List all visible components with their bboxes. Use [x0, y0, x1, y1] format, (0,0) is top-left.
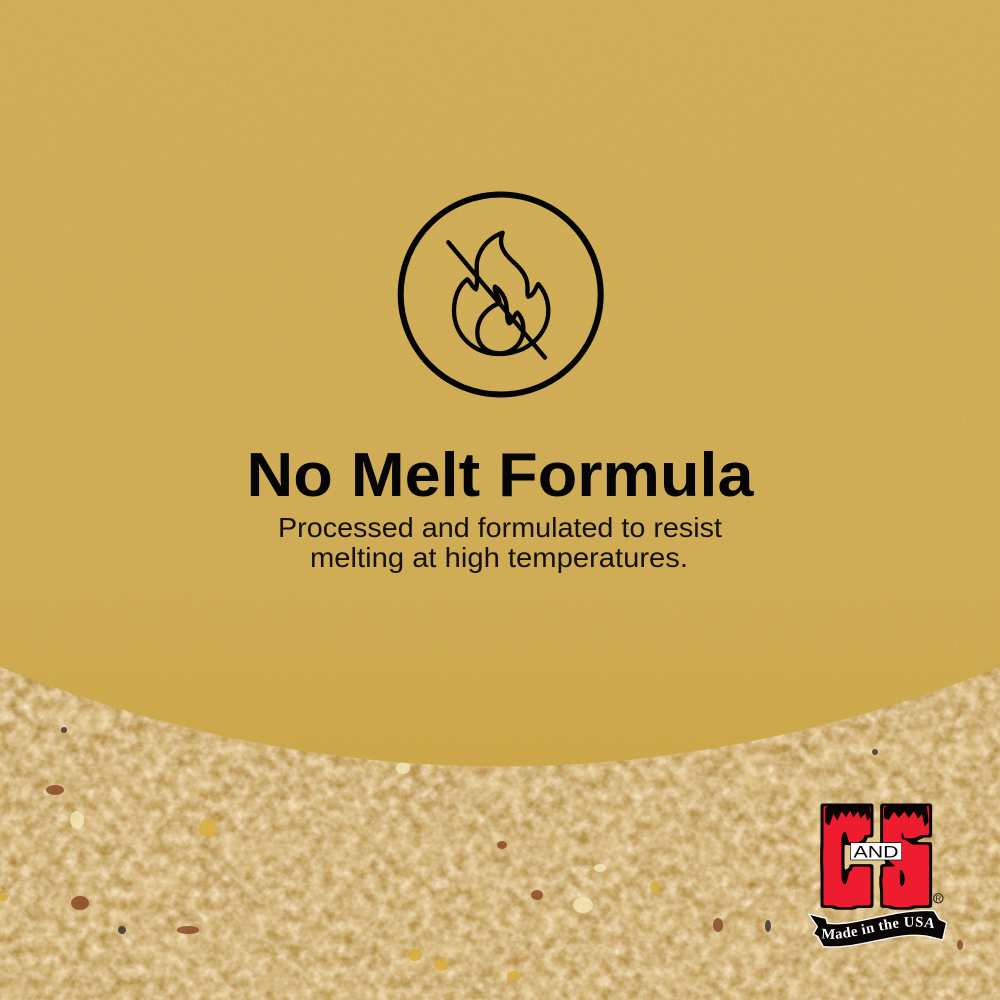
- logo letters C S: S: [885, 785, 918, 933]
- logo slit background: [845, 823, 908, 890]
- description text: Processed and formulated to resist: [278, 512, 722, 543]
- logo AND box: [851, 842, 902, 861]
- logo burnt tops: [825, 804, 929, 827]
- logo registered mark: [934, 894, 943, 903]
- panel: sand texture: [0, 660, 1000, 1000]
- description text: melting at high temperatures.: [310, 542, 688, 573]
- logo banner: Made in the USA: [822, 916, 934, 939]
- icon flame and slash: [448, 233, 548, 358]
- logo letters C S: C: [826, 785, 861, 933]
- logo registered mark: R: [935, 894, 941, 903]
- logo banner: [808, 910, 948, 948]
- title: No Melt Formula: [246, 441, 754, 510]
- logo: C and S Made in the USA: [808, 785, 948, 948]
- gold background: [0, 0, 1000, 780]
- description text: [278, 512, 722, 573]
- logo letters C S: [826, 785, 925, 933]
- logo AND box: AND: [853, 842, 898, 861]
- icon: no flame: [401, 194, 601, 394]
- icon ring: [401, 194, 601, 394]
